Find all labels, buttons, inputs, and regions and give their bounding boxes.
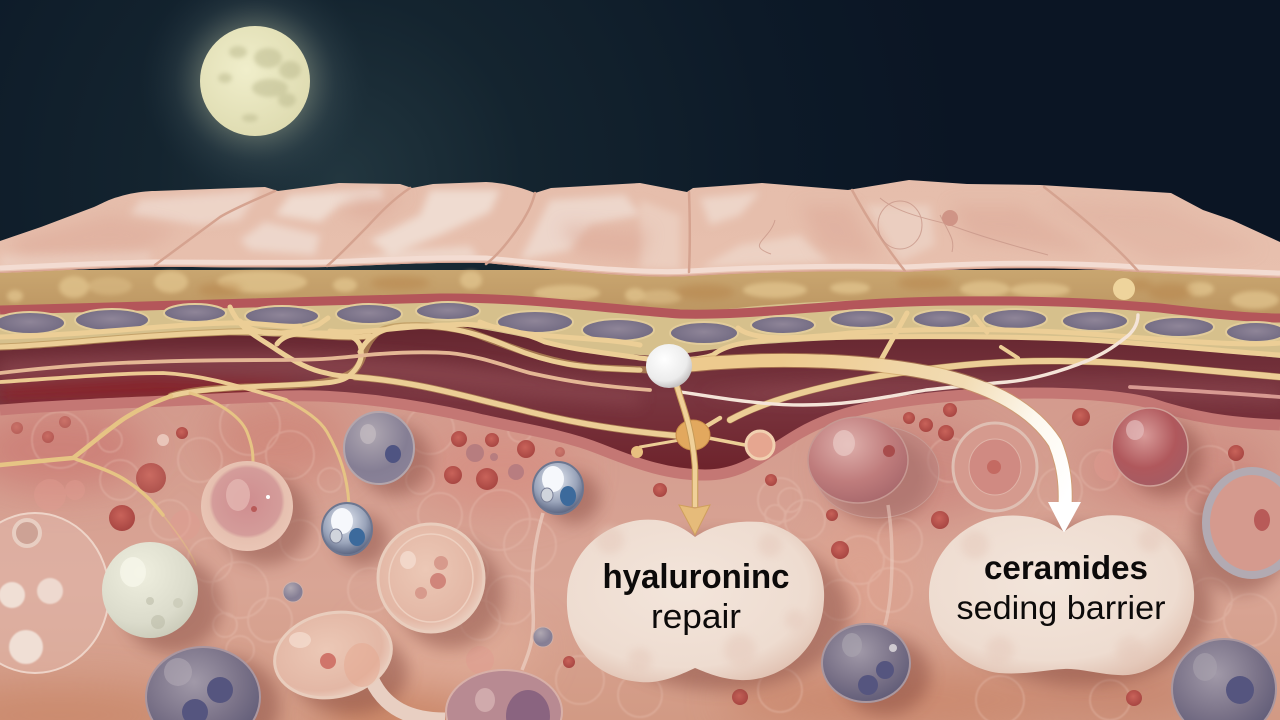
nerve outlines [0,326,1280,436]
cell: metallic granule left [322,503,372,555]
panel: maroon deep layer [0,300,1280,490]
icon: pearl cell [646,344,692,388]
arrow: thick curved to ceramides blob [690,360,1081,533]
thin pale fibres [0,352,1280,400]
cell: red sphere [1112,408,1188,486]
blob label: ceramides seding barrier [929,515,1194,675]
nerve fibre network [0,307,1280,565]
night sky background [0,0,1280,300]
panel: tan fatty layer [0,270,1280,318]
panel: yellow basal cell layer [0,300,1280,358]
cell: dark purple bottom right [1172,639,1276,720]
blob label: hyaluronic repair [567,520,824,682]
cell: rose-purple bottom [446,670,562,720]
panel: purple basal cells [0,302,1280,344]
skin capillary detail [759,198,1048,255]
cell: grey-purple sphere [344,412,414,484]
pale tract centre [885,505,892,625]
node: branching junction [631,420,774,459]
dermis edge band [0,393,1280,475]
cell: dark purple bottom left [146,647,260,720]
blob label: ceramides seding barrier: seding barrier [956,589,1166,626]
cell: grey ring cell [1206,471,1280,575]
blob label: hyaluronic repair: hyaluroninc [602,558,790,596]
cell: pale ring cell [378,524,484,632]
cell: white sphere [102,542,198,638]
cell: large translucent vesicle [0,513,109,673]
cell: rose sphere [808,417,908,503]
icon: full moon [140,0,370,196]
arrow: to hyaluronic blob [676,383,710,535]
pale thin tract [522,513,543,670]
small grey bead lower [533,627,553,647]
branching nerve to cells [0,393,349,565]
cell: metallic granule right [533,462,583,514]
translucent lobe behind rose sphere [815,426,939,518]
cell: pink nucleated cell [201,461,293,551]
panel: skin surface with seams [0,175,1280,285]
small grey bead [283,582,303,602]
panel: dermis tissue [0,385,1280,720]
blob label: ceramides seding barrier: ceramides [984,549,1148,586]
red capillary band [0,298,1280,318]
red dots [11,403,1244,706]
skin seams [155,187,1138,272]
blob label: hyaluronic repair: repair [651,598,741,636]
cellular texture [32,395,1276,720]
pale duct tail [372,680,445,720]
cell: dark purple centre [822,624,910,702]
cell: oval vesicle [267,602,399,708]
cell: pale ring cell right [953,423,1037,511]
nerve fibres [0,307,1280,447]
soft shadows under cells [122,420,1280,720]
highlight rim along skin front edge [0,258,1280,273]
